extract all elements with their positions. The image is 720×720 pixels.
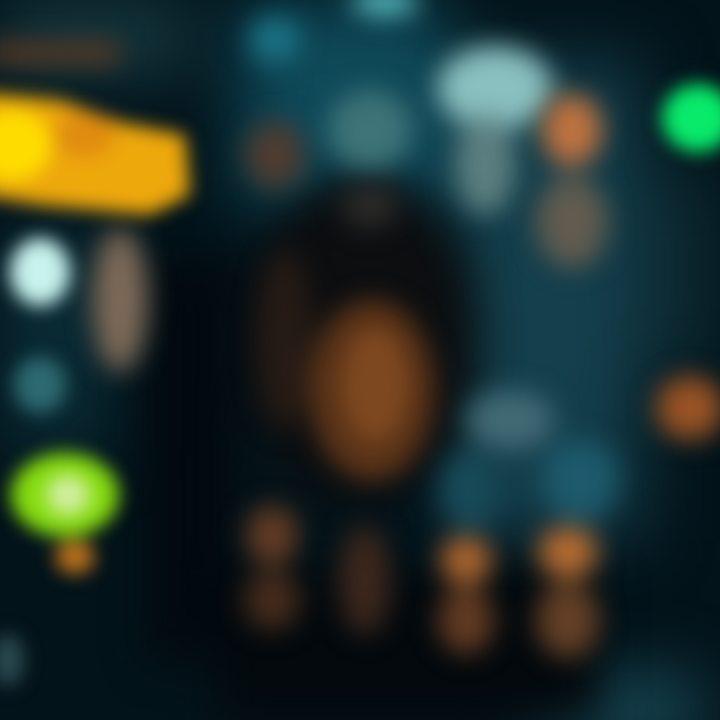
- brown centre highlight: [343, 330, 407, 440]
- light: white cyan: [0, 238, 70, 686]
- sign: yellow band: [0, 92, 190, 215]
- tan column: [0, 42, 148, 372]
- light: lime sign: [11, 453, 119, 574]
- figures and warm patches: [244, 94, 720, 658]
- light: green sign: [662, 84, 720, 152]
- dark figure silhouette: [150, 175, 600, 720]
- top lights: [249, 0, 553, 215]
